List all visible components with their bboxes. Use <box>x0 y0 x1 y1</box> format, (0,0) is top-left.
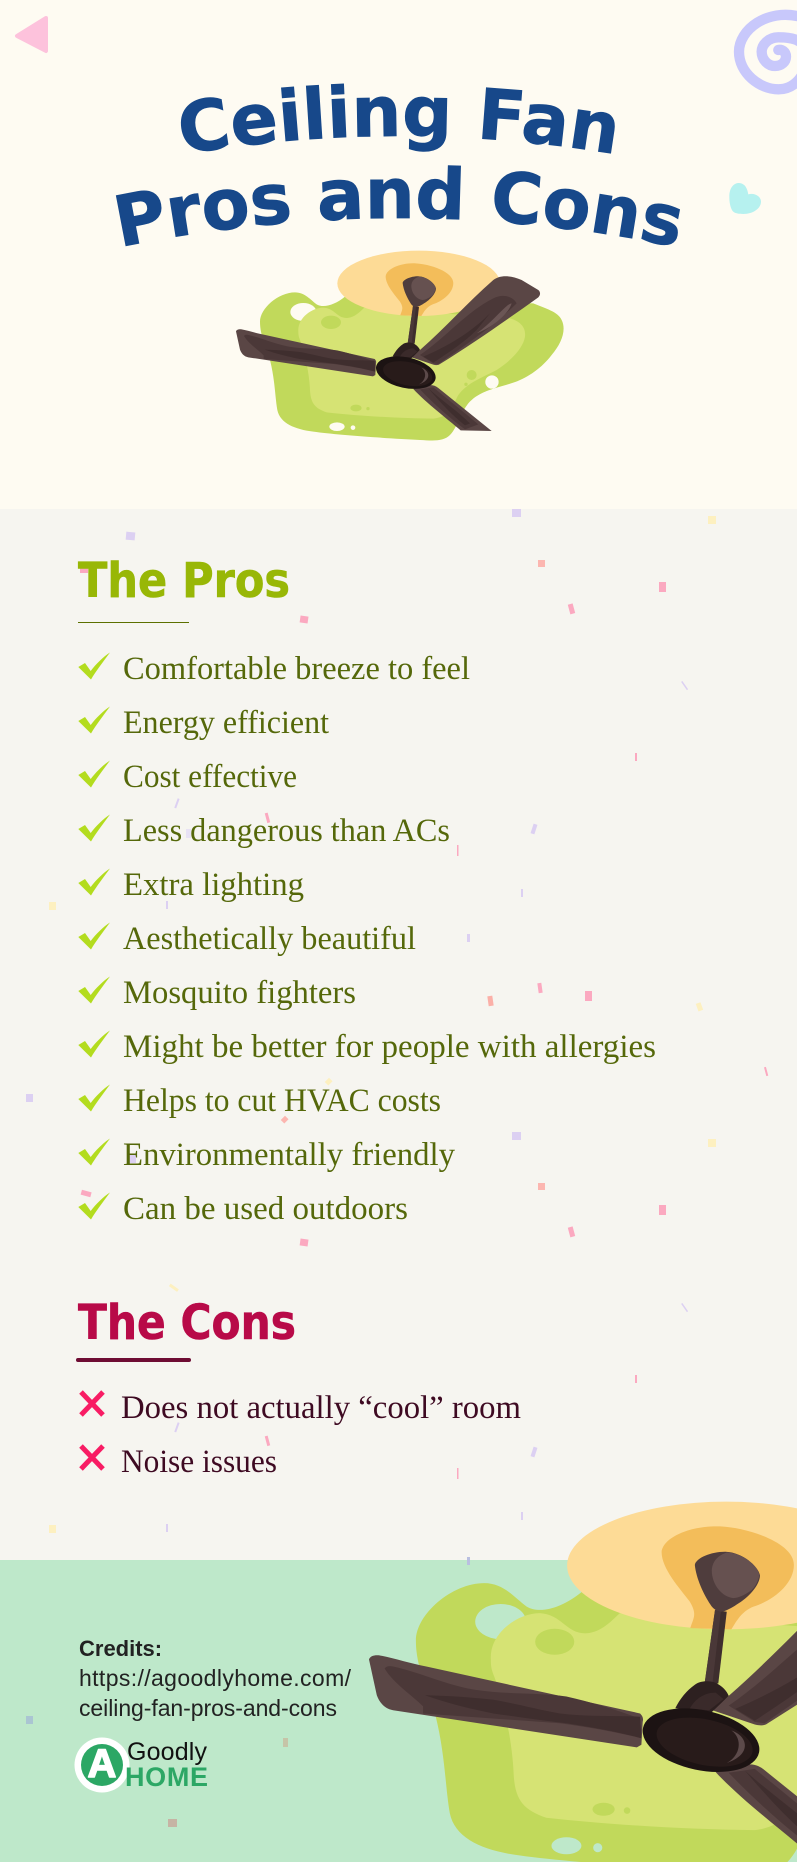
logo badge: A <box>88 1742 116 1786</box>
con item 2: Noise issues <box>121 1444 277 1480</box>
cons heading underline <box>76 1358 191 1362</box>
logo: Goodly Home <box>74 1738 208 1792</box>
content background <box>0 509 797 1560</box>
pro item 8: Might be better for people with allergies <box>123 1029 656 1065</box>
con item 1: Does not actually “cool” room <box>121 1390 521 1426</box>
pros list <box>78 651 656 1227</box>
credits block <box>79 1636 352 1721</box>
pro item 2: Energy efficient <box>123 705 329 741</box>
pro item 9: Helps to cut HVAC costs <box>123 1083 441 1119</box>
credits url line 2: ceiling-fan-pros-and-cons <box>79 1695 337 1721</box>
pro item 10: Environmentally friendly <box>123 1137 456 1173</box>
illustration: ceiling fan on green blob <box>236 251 564 440</box>
pro item 5: Extra lighting <box>123 867 304 903</box>
title line 1: Ceiling Fan <box>180 84 615 154</box>
logo word Home: HOME <box>125 1762 208 1792</box>
cons list <box>81 1390 521 1480</box>
title line 2: Pros and Cons <box>116 165 680 246</box>
logo word Goodly: Goodly <box>127 1738 208 1766</box>
pro item 3: Cost effective <box>123 759 297 795</box>
icon: lavender swirl <box>739 15 797 89</box>
pro item 1: Comfortable breeze to feel <box>123 651 470 687</box>
credits label: Credits: <box>79 1636 162 1661</box>
icon: pink triangle <box>17 18 46 51</box>
heading: The Cons: The Cons <box>78 1295 296 1351</box>
pro item 4: Less dangerous than ACs <box>123 813 450 849</box>
heading: The Pros: The Pros <box>78 553 290 609</box>
confetti <box>26 509 768 1827</box>
footer background <box>0 1560 797 1862</box>
illustration: large ceiling fan in footer <box>369 1502 797 1862</box>
pro item 11: Can be used outdoors <box>123 1191 408 1227</box>
credits url: https://agoodlyhome.com/ <box>79 1665 352 1691</box>
title <box>116 84 680 246</box>
pro item 7: Mosquito fighters <box>123 975 356 1011</box>
pros heading underline <box>78 622 189 623</box>
icon: cyan heart <box>729 183 761 214</box>
pro item 6: Aesthetically beautiful <box>123 921 416 957</box>
header background <box>0 0 797 509</box>
